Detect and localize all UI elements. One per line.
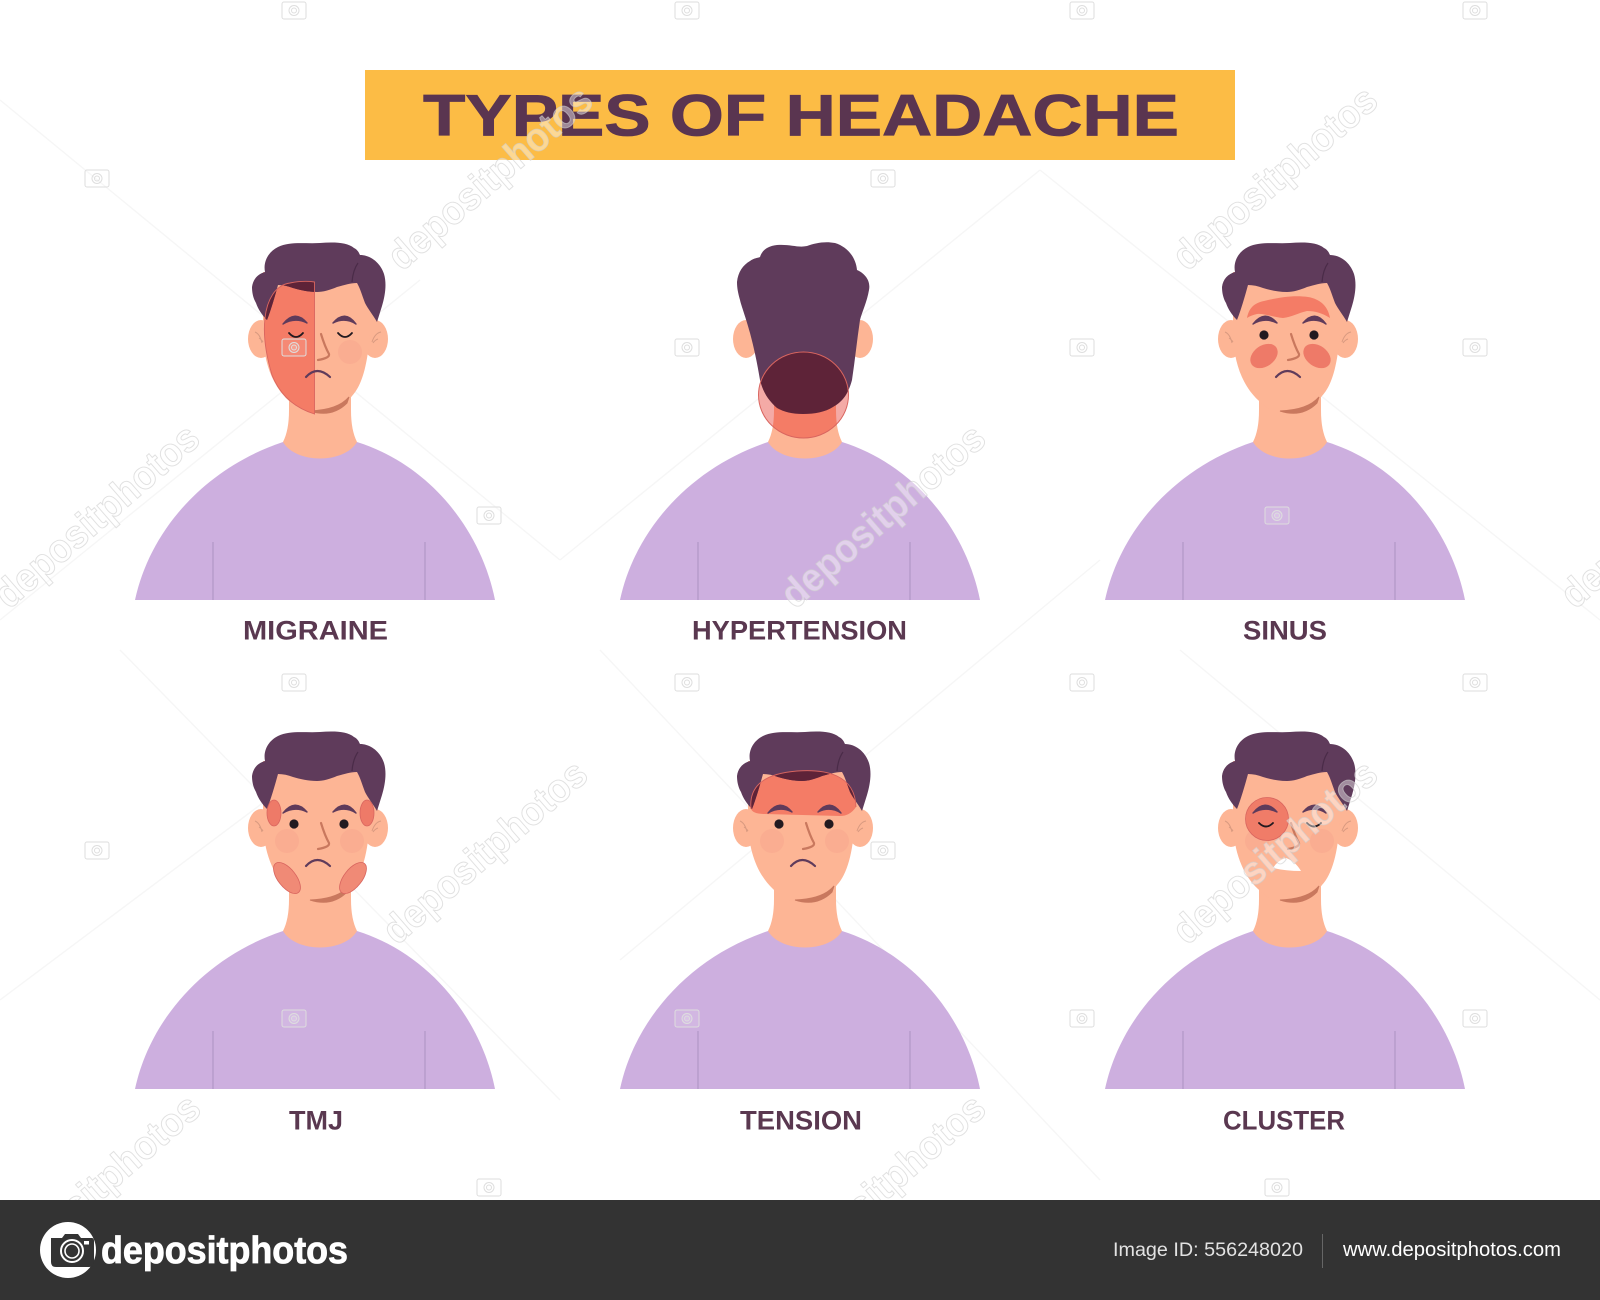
pain area: left half of face — [264, 281, 314, 414]
label: SINUS — [1243, 616, 1327, 646]
facial features — [768, 805, 841, 866]
pain area over hair — [264, 281, 314, 414]
clenched teeth — [1273, 858, 1301, 871]
label: TMJ — [289, 1106, 343, 1136]
watermarks: depositphotos — [1164, 78, 1386, 279]
label: MIGRAINE — [243, 616, 388, 646]
figure: hypertension — [620, 242, 980, 646]
pain area: right cheek — [1299, 339, 1335, 373]
logo wordmark: depositphotos — [101, 1230, 348, 1272]
title banner: TYPES OF HEADACHE — [423, 84, 1179, 148]
watermarks: depositphotos — [1164, 752, 1386, 953]
website: www.depositphotos.com — [1342, 1239, 1561, 1261]
pain area: left jaw — [269, 858, 305, 898]
label: HYPERTENSION — [692, 616, 907, 646]
watermarks: depositphotos — [772, 1086, 994, 1287]
eyes — [1259, 330, 1319, 340]
facial features — [1253, 316, 1326, 377]
torso — [620, 380, 980, 600]
image id: Image ID: 556248020 — [1113, 1239, 1303, 1261]
pain area: left cheek — [1246, 339, 1282, 373]
watermarks: depositphotos — [374, 752, 596, 953]
figure: cluster — [1105, 732, 1465, 1136]
icon: depositphotos camera logo — [40, 1222, 96, 1278]
closed eyes — [289, 333, 352, 337]
eyebrows — [1253, 805, 1326, 813]
pain area: right temple — [360, 800, 374, 826]
person — [135, 732, 495, 1089]
watermarks: depositphotos — [772, 416, 994, 617]
eyes — [774, 819, 834, 829]
hair — [252, 243, 385, 322]
ears — [733, 320, 873, 358]
title banner — [365, 70, 1235, 160]
person — [1105, 243, 1465, 600]
pain area: eye circle — [1246, 798, 1288, 840]
figure: migraine — [135, 243, 495, 646]
head — [248, 272, 388, 414]
person — [1105, 732, 1465, 1089]
cheek blush — [760, 829, 849, 853]
label: TENSION — [740, 1106, 862, 1136]
cheek blush — [338, 340, 362, 364]
cheek blush — [275, 829, 364, 853]
footer bar — [0, 1200, 1600, 1300]
pain area: left temple — [267, 800, 281, 826]
pain area: forehead — [1247, 296, 1330, 318]
closed eyes — [1259, 823, 1321, 826]
figure: TMJ — [135, 732, 495, 1136]
eyes — [289, 819, 349, 829]
facial features — [283, 805, 356, 866]
figure: tension — [620, 732, 980, 1136]
nose — [1288, 823, 1299, 849]
watermarks: depositphotos — [379, 78, 601, 279]
cheek blush — [1245, 829, 1334, 853]
back of head hair — [737, 242, 869, 414]
pain area: back of neck — [758, 352, 848, 438]
pain area: forehead band — [751, 771, 856, 816]
pain area: right jaw — [335, 858, 371, 898]
figure: sinus — [1105, 243, 1465, 646]
person — [620, 732, 980, 1089]
torso — [135, 380, 495, 600]
hair — [737, 732, 870, 811]
facial features — [283, 316, 356, 377]
pain area over hair — [750, 770, 856, 809]
label: CLUSTER — [1223, 1106, 1345, 1136]
